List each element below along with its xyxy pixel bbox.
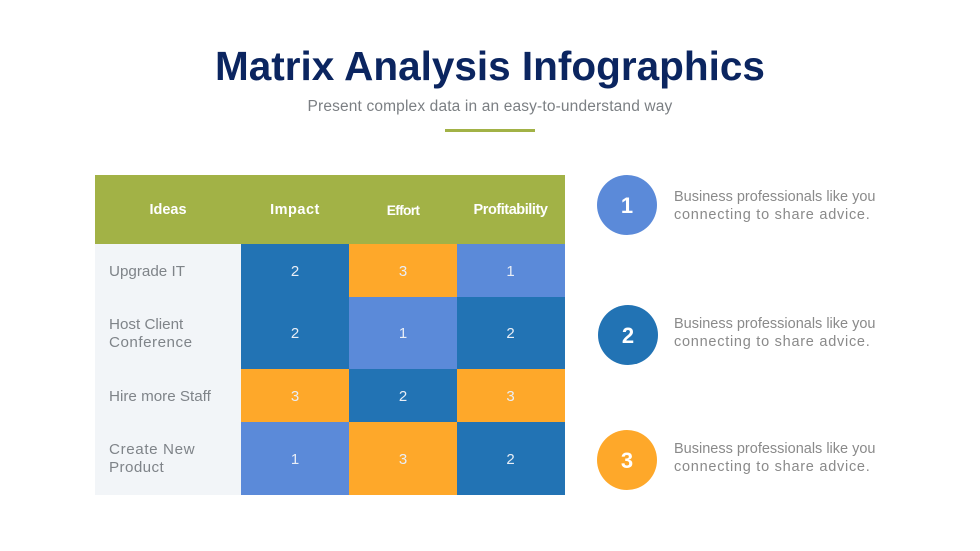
badge 2 (598, 305, 658, 365)
cell: Host Client effort (349, 297, 457, 369)
cell: Hire Staff impact (241, 369, 349, 422)
subtitle: Present complex data in an easy-to-understand way (308, 98, 672, 115)
description 1: Business professionals like you (674, 189, 876, 205)
header: Impact: Impact (270, 202, 320, 218)
title underline (445, 129, 535, 132)
cell: Hire Staff profitability: 3 (506, 388, 515, 404)
badge 1: 1 (621, 192, 633, 218)
title: Matrix Analysis Infographics (215, 43, 765, 89)
cell: Upgrade IT impact: 2 (291, 262, 299, 280)
description 1 (674, 189, 876, 223)
header: Ideas: Ideas (149, 202, 187, 218)
row label: Host Client Conference (109, 316, 193, 350)
cell: Hire Staff effort: 2 (399, 388, 407, 404)
header: Profitability: Profitability (474, 202, 547, 218)
cell: New Product impact: 1 (291, 450, 299, 468)
header: Effort: Effort (387, 202, 419, 218)
description 3 (674, 441, 876, 475)
badge 2: 2 (622, 322, 634, 348)
cell: Upgrade IT impact (241, 244, 349, 297)
table header band (95, 175, 565, 244)
cell: Host Client impact: 2 (291, 325, 299, 342)
row label: Create New Product: Product (109, 458, 164, 476)
row label: Upgrade IT: Upgrade IT (109, 263, 185, 280)
badge 3: 3 (621, 448, 633, 472)
description 2 (674, 316, 876, 350)
description 1: connecting to share advice. (674, 207, 871, 223)
cell: New Product effort (349, 422, 457, 495)
row label: Host Client Conference: Host Client (109, 316, 183, 333)
row label: Hire more Staff: Hire more Staff (109, 388, 211, 405)
cell: Host Client effort: 1 (399, 325, 407, 342)
cell: Upgrade IT effort (349, 244, 457, 297)
cell: Upgrade IT profitability: 1 (506, 262, 515, 280)
badge 3 (597, 430, 657, 490)
cell: New Product profitability (457, 422, 565, 495)
panel: matrix table (95, 175, 565, 495)
cell: Hire Staff profitability (457, 369, 565, 422)
cell: Hire Staff impact: 3 (291, 388, 299, 404)
cell: Hire Staff effort (349, 369, 457, 422)
description 2: connecting to share advice. (674, 334, 871, 350)
row label: Host Client Conference: Conference (109, 334, 193, 350)
description 3: Business professionals like you (674, 441, 876, 457)
badge 1 (597, 175, 657, 235)
description 3: connecting to share advice. (674, 459, 871, 475)
cell: New Product impact (241, 422, 349, 495)
cell: New Product profitability: 2 (506, 450, 515, 468)
description 2: Business professionals like you (674, 316, 876, 332)
cell: New Product effort: 3 (399, 450, 407, 468)
cell: Host Client impact (241, 297, 349, 369)
row label: Create New Product: Create New (109, 441, 195, 458)
cell: Host Client profitability: 2 (506, 325, 515, 342)
row label: Create New Product (109, 441, 195, 476)
cell: Upgrade IT effort: 3 (399, 262, 407, 280)
cell: Host Client profitability (457, 297, 565, 369)
cell: Upgrade IT profitability (457, 244, 565, 297)
